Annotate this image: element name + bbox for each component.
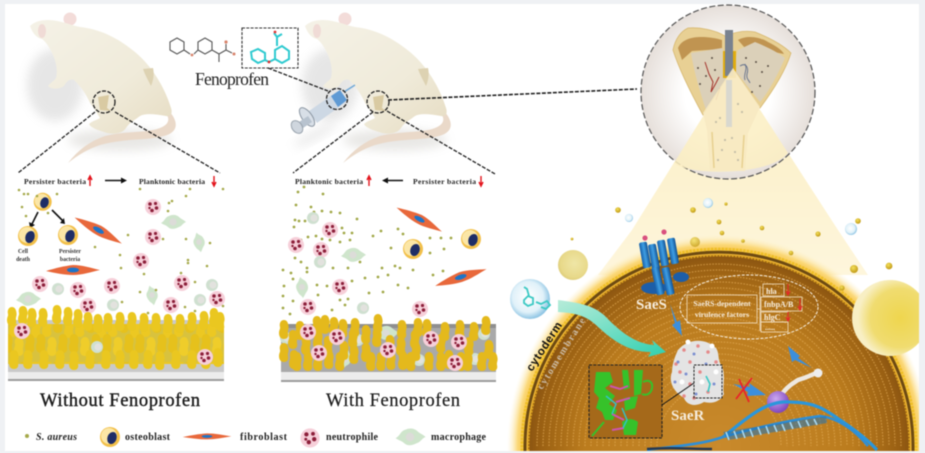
legend	[25, 427, 487, 448]
status line right	[295, 177, 476, 186]
biofilm	[7, 305, 225, 370]
osteoblast with death pathways	[18, 193, 78, 246]
bone lens	[641, 5, 815, 179]
legend: osteoblast	[100, 427, 171, 447]
virulence factors callout	[680, 275, 818, 339]
molecule box: fenoprofen 3D model	[242, 28, 298, 68]
label: SaeS: SaeS	[636, 297, 667, 313]
virulence factors callout: hlgC	[764, 313, 781, 322]
legend: macrophage: macrophage	[431, 432, 487, 443]
blocked arrow	[733, 378, 766, 402]
panel: with fenoprofen	[279, 176, 498, 411]
residual macrophages on plate	[280, 326, 490, 371]
legend: fibroblast	[183, 432, 288, 443]
fibroblasts	[46, 212, 124, 275]
molecule: fenoprofen skeletal formula	[170, 38, 236, 62]
labels: cell fates	[16, 249, 81, 263]
legend: S. aureus: S. aureus	[36, 432, 77, 443]
inset: SaeR ribbon model	[589, 365, 662, 438]
status line left	[24, 177, 205, 186]
legend: macrophage	[396, 428, 487, 445]
cytoplasm rings	[537, 264, 901, 446]
S. aureus dense cloud	[283, 187, 451, 314]
virulence factors callout: hla	[766, 287, 777, 296]
connector line	[662, 383, 694, 405]
labels: cell fates: Persister	[59, 249, 81, 255]
page border bottom	[0, 451, 925, 453]
SaeR protein surface	[671, 341, 724, 405]
heading: with fenoprofen: With Fenoprofen	[326, 391, 460, 411]
mouse with fenoprofen	[302, 12, 451, 163]
injection site and dashed leaders	[268, 68, 637, 174]
red X	[736, 378, 752, 402]
bone section lower	[703, 68, 760, 171]
SaeS receptor	[639, 229, 689, 296]
status line left: Planktonic bacteria	[139, 177, 205, 186]
label: cytomembrane: cytomembrane	[535, 316, 588, 392]
RNA polymerase with peptide chain	[767, 368, 822, 413]
macrophages right	[295, 212, 369, 314]
title: Fenoprofen: Fenoprofen	[195, 69, 269, 89]
cell membrane	[522, 249, 916, 451]
cone: zoom beam from bone to bacterium	[598, 68, 868, 275]
status line left: Persister bacteria	[24, 177, 86, 186]
status line right: Planktonic bacteria	[295, 177, 363, 186]
neutrophils	[32, 199, 225, 314]
label: SaeR: SaeR	[671, 408, 704, 424]
labels: cell fates: bacteria	[60, 257, 80, 263]
gene boxes	[761, 284, 802, 332]
heading: without fenoprofen: Without Fenoprofen	[40, 391, 200, 411]
bacterial cell	[507, 234, 919, 451]
status arrows right	[367, 176, 483, 186]
syringe	[289, 85, 355, 151]
legend: neutrophile: neutrophile	[326, 432, 379, 443]
panel: without fenoprofen	[7, 176, 225, 411]
virulence factors callout: virulence factors	[695, 310, 749, 319]
legend: neutrophile	[300, 428, 379, 448]
status arrows left	[88, 176, 216, 186]
golden spheres	[558, 202, 919, 356]
infected site marker and zoom lines, left	[18, 91, 220, 173]
neutrophils on plate	[300, 324, 467, 371]
virulence factors callout: SaeRS-dependent	[693, 299, 751, 308]
legend: fibroblast: fibroblast	[240, 432, 288, 443]
mouse without fenoprofen	[27, 12, 176, 163]
arrow: drug entry	[558, 300, 666, 357]
legend: osteoblast: osteoblast	[125, 432, 171, 443]
drug bubble with molecule	[510, 279, 550, 319]
sparse osteoblast layer	[279, 314, 498, 371]
arrow: mRNA to virulence factors	[788, 346, 812, 368]
titanium plate	[281, 324, 496, 382]
fibroblasts right	[395, 203, 488, 290]
virulence factors callout: fnbpA/B	[764, 300, 794, 309]
labels: cell fates: Cell	[18, 249, 28, 255]
arrow: SaeS to SaeR	[670, 304, 682, 336]
biofilm base plate	[8, 320, 224, 381]
DNA helix	[647, 402, 877, 450]
virulence factors callout: .....	[765, 323, 775, 332]
labels: cell fates: death	[16, 257, 31, 263]
bone section upper	[673, 28, 791, 115]
bubbles	[625, 198, 857, 235]
S. aureus scattered left	[19, 189, 223, 313]
red arrows	[786, 284, 802, 321]
label: cytoderm: cytoderm	[524, 320, 565, 374]
neutrophils right	[288, 222, 428, 317]
status line right: Persister bacteria	[413, 177, 476, 186]
osteoblasts right	[403, 229, 481, 259]
bone pin	[725, 30, 733, 76]
macrophages	[16, 215, 218, 311]
